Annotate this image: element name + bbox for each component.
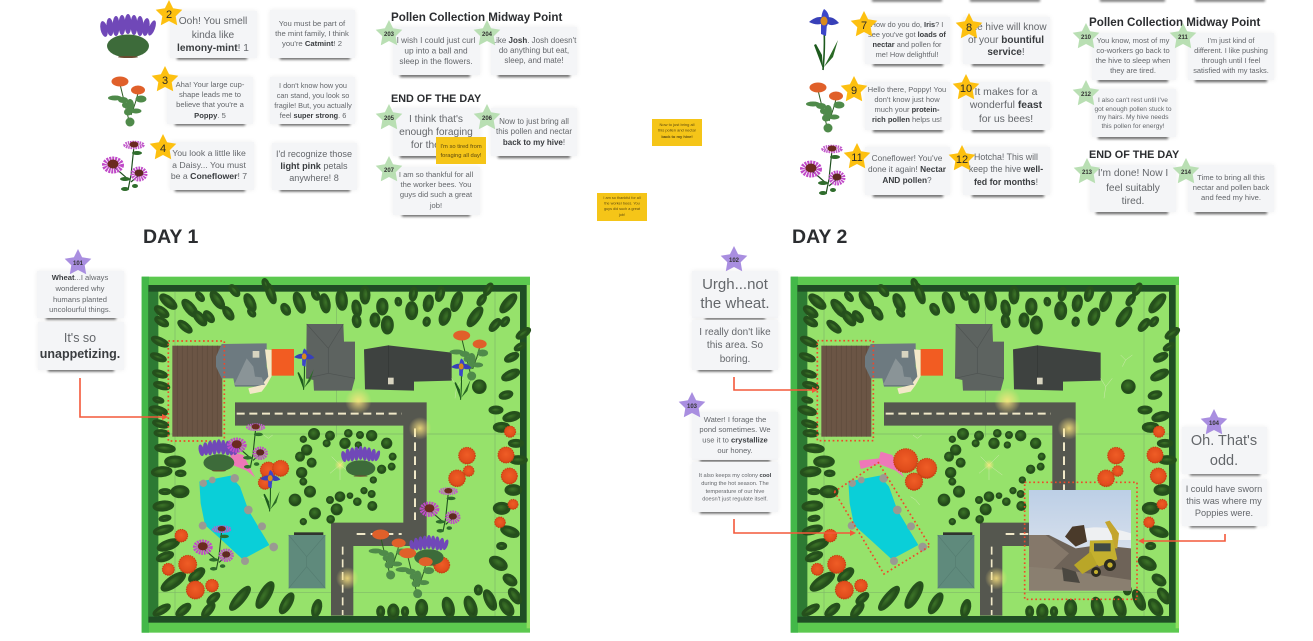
icon: poppy plant (806, 82, 844, 132)
note: super strong: can stand, you look so (277, 91, 349, 100)
plants: iris (260, 348, 471, 511)
note 103a: our honey. (717, 446, 753, 455)
note 102a (692, 271, 778, 320)
note 212: got enough pollen stuck to (1095, 106, 1172, 113)
map base: lawn, roads, houses, trees (791, 277, 1180, 633)
note: coneflower (170, 142, 254, 192)
note 210: the hive to sleep when (1096, 56, 1170, 65)
arrow to wheat field (80, 378, 168, 420)
note 104b: I could have sworn (1186, 484, 1262, 494)
note 103a: use it to crystallize (702, 436, 768, 444)
note: coneflower: be a Coneflower! 7 (171, 171, 247, 181)
panel: day 2 pollen collection and end of day (1073, 16, 1274, 214)
note 204: do anything but eat, (499, 46, 569, 55)
note 211: through until I feel (1202, 56, 1261, 65)
note 211 (1188, 33, 1274, 82)
note: wonderful feast: wonderful feast (970, 100, 1042, 111)
note: bountiful service: The hive will know (965, 22, 1047, 33)
note: poppy (167, 77, 253, 126)
note: super strong: feel super strong. 6 (280, 111, 346, 120)
star 206 (474, 104, 500, 129)
note 207: I am so thankful for all (399, 170, 473, 179)
note: protein-rich pollen: Hello there, Poppy! You (868, 85, 946, 94)
note 102b: this area. So (707, 340, 764, 351)
star 203 (376, 20, 402, 45)
note: protein-rich pollen: much your protein- (874, 105, 940, 114)
heading: pollen collection midway point: Pollen Collection Midway Point (391, 11, 562, 24)
star 204: 204 (482, 32, 493, 38)
heading: pollen collection midway point: Pollen Collection Midway Point (1089, 16, 1260, 29)
note: lemony-mint (170, 11, 257, 60)
map: day 1 garden (142, 277, 531, 633)
star 12: 12 (956, 154, 968, 166)
sticky note: back to my hive: this pollen and nectar (658, 128, 697, 132)
note: catmint (270, 10, 355, 60)
star 11: 11 (851, 152, 863, 164)
note 101b: unappetizing. (40, 347, 120, 361)
sticky note: tired from foraging (436, 137, 486, 164)
star 102 (721, 246, 747, 271)
note 103a: Water! I forage the (704, 415, 766, 424)
note: bountiful service: service! (987, 47, 1025, 58)
star 212: 212 (1081, 92, 1092, 98)
note: nectar and pollen (865, 147, 950, 197)
callout: pond, day 2 (679, 392, 856, 536)
star 205 (376, 104, 402, 129)
note: lemony-mint: lemony-mint! 1 (177, 43, 249, 54)
star 3: 3 (162, 75, 168, 87)
star 7 (851, 11, 877, 36)
note 104a (1182, 427, 1267, 476)
star 11 (844, 143, 870, 168)
plants: lavender (198, 439, 450, 566)
callout: wheat, day 2 (692, 246, 818, 393)
star 4 (150, 134, 176, 159)
note: poppy: believe that you're a (176, 100, 245, 109)
note 204: Like Josh. Josh doesn't (492, 36, 576, 45)
callout: poppies, day 2 (1138, 409, 1267, 544)
note 207: job! (429, 201, 442, 210)
note: catmint: the mint family, I think (275, 29, 349, 38)
note: poppy: Aha! Your large cup- (176, 80, 245, 89)
star 9 (841, 76, 867, 101)
note 102a: Urgh...not (702, 276, 769, 293)
note: bountiful service: of your bountiful (968, 35, 1044, 46)
note: catmint: you're Catmint! 2 (282, 39, 342, 48)
flowers in red cluster (258, 460, 450, 573)
note: catmint: You must be part of (279, 19, 346, 28)
sticky note: back to my hive (652, 119, 702, 146)
note 210: co-workers go back to (1096, 46, 1170, 55)
note 206: this pollen and nectar (496, 127, 572, 136)
note 206: back to my hive! (503, 138, 565, 147)
sticky note: tired from foraging: foraging all day! (441, 153, 482, 159)
note 103b (692, 462, 778, 514)
note: iris nectar: nectar and pollen for (872, 40, 942, 49)
sticky note: back to my hive: back to my hive! (661, 134, 693, 139)
star 205: 205 (384, 116, 395, 122)
note 206 (491, 108, 577, 158)
note 214: Time to bring all this (1197, 173, 1265, 182)
photo: construction site (1029, 490, 1131, 591)
note 205: for the day. (411, 140, 461, 151)
note: poppy: Poppy. 5 (194, 111, 226, 120)
note: coneflower: a Daisy... You must (172, 160, 246, 170)
note: light pink petals: anywhere! 8 (289, 173, 339, 183)
sticky note: thankful: job! (618, 213, 625, 217)
sticky note: thankful: guys did such a great (604, 207, 641, 211)
note 104b: Poppies were. (1195, 508, 1253, 518)
note: coneflower: You look a little like (172, 148, 246, 158)
note 101a: uncolourful things. (49, 305, 111, 314)
note 103b: doesn't just regulate itself. (702, 496, 768, 502)
note: iris nectar: me! How delightful! (876, 50, 938, 59)
note: bountiful service (963, 17, 1050, 66)
highlight: wheat field (817, 341, 873, 441)
note: iris nectar: see you've got loads of (868, 30, 946, 39)
star 104: 104 (1209, 421, 1220, 427)
note 206: Now to just bring all (499, 117, 569, 126)
note 210: they are tired. (1110, 66, 1156, 75)
star 211 (1170, 23, 1196, 48)
note: protein-rich pollen: don't know just how (874, 95, 940, 104)
clipped card shadows along the top edge (872, 0, 1265, 2)
note: wonderful feast: for us bees! (979, 114, 1033, 125)
icon: iris plant (809, 9, 839, 70)
note 203: I wish I could just curl (397, 35, 476, 45)
star 206: 206 (482, 116, 493, 122)
arrow to wheat field (734, 377, 818, 393)
note 213 (1090, 165, 1176, 214)
heading: day 1: DAY 1 (143, 226, 198, 248)
note: protein-rich pollen (865, 82, 950, 132)
note 103b: temperature of our hive (706, 489, 764, 495)
note: light pink petals (272, 143, 357, 192)
note: light pink petals: light pink petals (280, 161, 348, 171)
note: well-fed: Hotcha! This will (974, 152, 1038, 162)
star 213 (1074, 158, 1100, 183)
map: day 2 garden (791, 277, 1180, 633)
note 214: nectar and pollen back (1193, 183, 1269, 192)
star 2: 2 (166, 9, 172, 21)
note 104a: odd. (1210, 453, 1238, 469)
note 102b (692, 320, 778, 372)
note: protein-rich pollen: rich pollen helps us! (872, 115, 942, 124)
star 212 (1073, 80, 1099, 105)
star 2 (156, 0, 182, 25)
note 212: I also can't rest until I've (1098, 97, 1168, 104)
note 212: this pollen for energy! (1101, 123, 1165, 130)
star 210: 210 (1081, 35, 1092, 41)
icon: coneflower plant (803, 146, 843, 195)
note: poppy: shape leads me to (179, 90, 241, 99)
arrow to construction site (1138, 534, 1225, 544)
highlight: pond (834, 463, 930, 574)
sticky note: thankful: the worker bees. You (604, 202, 640, 206)
note: wonderful feast (963, 82, 1050, 132)
note 203: up into a ball and (404, 46, 468, 56)
note: wonderful feast: It makes for a (975, 87, 1038, 98)
note 103b: during the hot season. The (701, 481, 769, 487)
note: super strong (270, 77, 355, 126)
note 101b (38, 322, 124, 372)
star 204 (474, 20, 500, 45)
star 101: 101 (73, 261, 84, 267)
star 101 (65, 249, 91, 274)
star 210 (1073, 23, 1099, 48)
flowers in red cluster (894, 449, 937, 490)
note 212: my hairs. My hive needs (1097, 114, 1169, 121)
note: super strong: I don't know how you (279, 81, 347, 90)
star 7: 7 (861, 20, 867, 32)
note 102a: the wheat. (700, 295, 770, 312)
star 10 (953, 74, 979, 99)
note 213: I'm done! Now I (1098, 168, 1168, 179)
note: iris nectar (865, 17, 950, 66)
star 8: 8 (966, 22, 972, 34)
note 210: You know, most of my (1097, 36, 1170, 45)
note 212 (1092, 89, 1176, 139)
note 205 (393, 108, 480, 158)
note 101a: wondered why (55, 284, 105, 293)
note 214: and feed my hive. (1201, 193, 1261, 202)
note 213: feel suitably (1106, 183, 1161, 194)
note 205: I think that's (409, 114, 463, 125)
note 211: satisfied with my tasks. (1193, 66, 1269, 75)
note: nectar and pollen: AND pollen? (882, 175, 932, 185)
note 101a: Wheat...I always (52, 273, 108, 282)
highlight: missing poppies (1025, 482, 1137, 599)
note 101a (37, 271, 124, 320)
sticky note: thankful: I am so thankful for all (603, 196, 641, 200)
note 203 (393, 27, 480, 77)
note 103a: pond sometimes. We (699, 425, 771, 434)
note 102b: boring. (720, 354, 750, 365)
note: nectar and pollen: Coneflower! You've (872, 153, 943, 163)
note 104b (1182, 479, 1267, 528)
star 203: 203 (384, 32, 395, 38)
note 104a: Oh. That's (1191, 433, 1257, 449)
note 101b: It's so (64, 331, 96, 345)
note: super strong: fragile! But, you actually (274, 101, 352, 110)
note 204: sleep, and mate! (504, 56, 564, 65)
star 4: 4 (160, 143, 166, 155)
note 204 (491, 27, 577, 77)
plants: poppy (369, 330, 488, 598)
star 207: 207 (384, 168, 395, 174)
star 207 (376, 156, 402, 181)
star 10: 10 (960, 83, 972, 95)
star 214 (1173, 158, 1199, 183)
sticky note: thankful (597, 193, 647, 221)
star 102: 102 (729, 258, 740, 264)
note 102b: I really don't like (699, 327, 771, 338)
note 101a: humans planted (53, 295, 107, 304)
note 207: the worker bees. You (401, 180, 471, 189)
panel: day 1 pollen collection and end of day (376, 11, 577, 216)
note 214 (1188, 165, 1274, 214)
note: well-fed: keep the hive well- (969, 164, 1043, 174)
note 213: tired. (1122, 196, 1144, 207)
note 210 (1092, 33, 1176, 82)
plants: coneflower (196, 424, 458, 571)
note 207 (393, 167, 480, 216)
heading: end of the day: END OF THE DAY (1089, 149, 1180, 161)
note 203: sleep in the flowers. (399, 56, 473, 66)
star 12 (949, 145, 975, 170)
star 103: 103 (687, 404, 698, 410)
star 9: 9 (851, 85, 857, 97)
note 211: I'm just kind of (1207, 36, 1255, 45)
star 211: 211 (1178, 35, 1188, 41)
star 103 (679, 392, 705, 417)
icon: lavender plant (99, 14, 158, 58)
map base: lawn, roads, houses, trees (142, 277, 531, 633)
note: lemony-mint: kinda like (192, 30, 235, 41)
star 3 (152, 66, 178, 91)
star 214: 214 (1181, 170, 1192, 176)
note: well-fed (963, 147, 1050, 197)
note 103a (692, 412, 778, 462)
icon: poppy plant (108, 76, 146, 126)
note 205: enough foraging (399, 127, 473, 138)
icon: coneflower plant (105, 142, 145, 191)
note 103b: It also keeps my colony cool (699, 473, 771, 479)
panel: day 2 flower dialogue (803, 9, 1050, 197)
note 211: different. I like pushing (1194, 46, 1268, 55)
panel: day 1 flower dialogue (99, 0, 357, 192)
note: well-fed: fed for months! (974, 177, 1038, 187)
star 8 (956, 13, 982, 38)
heading: day 2: DAY 2 (792, 226, 847, 248)
note: iris nectar: How do you do, Iris? I (871, 20, 943, 29)
star 213: 213 (1082, 170, 1093, 176)
note: light pink petals: I'd recognize those (276, 149, 352, 159)
heading: end of the day: END OF THE DAY (391, 93, 482, 105)
note: lemony-mint: Ooh! You smell (179, 16, 247, 27)
highlight: wheat field (168, 341, 224, 441)
note 207: guys did such a great (400, 190, 473, 199)
arrow to pond (734, 519, 856, 536)
note: nectar and pollen: done it again! Nectar (868, 164, 946, 174)
callout: wheat, day 1 (37, 249, 168, 420)
sticky note: tired from foraging: I'm so tired from (440, 144, 482, 150)
sticky note: back to my hive: Now to just bring all (660, 122, 695, 127)
note 104b: this was where my (1186, 496, 1262, 506)
